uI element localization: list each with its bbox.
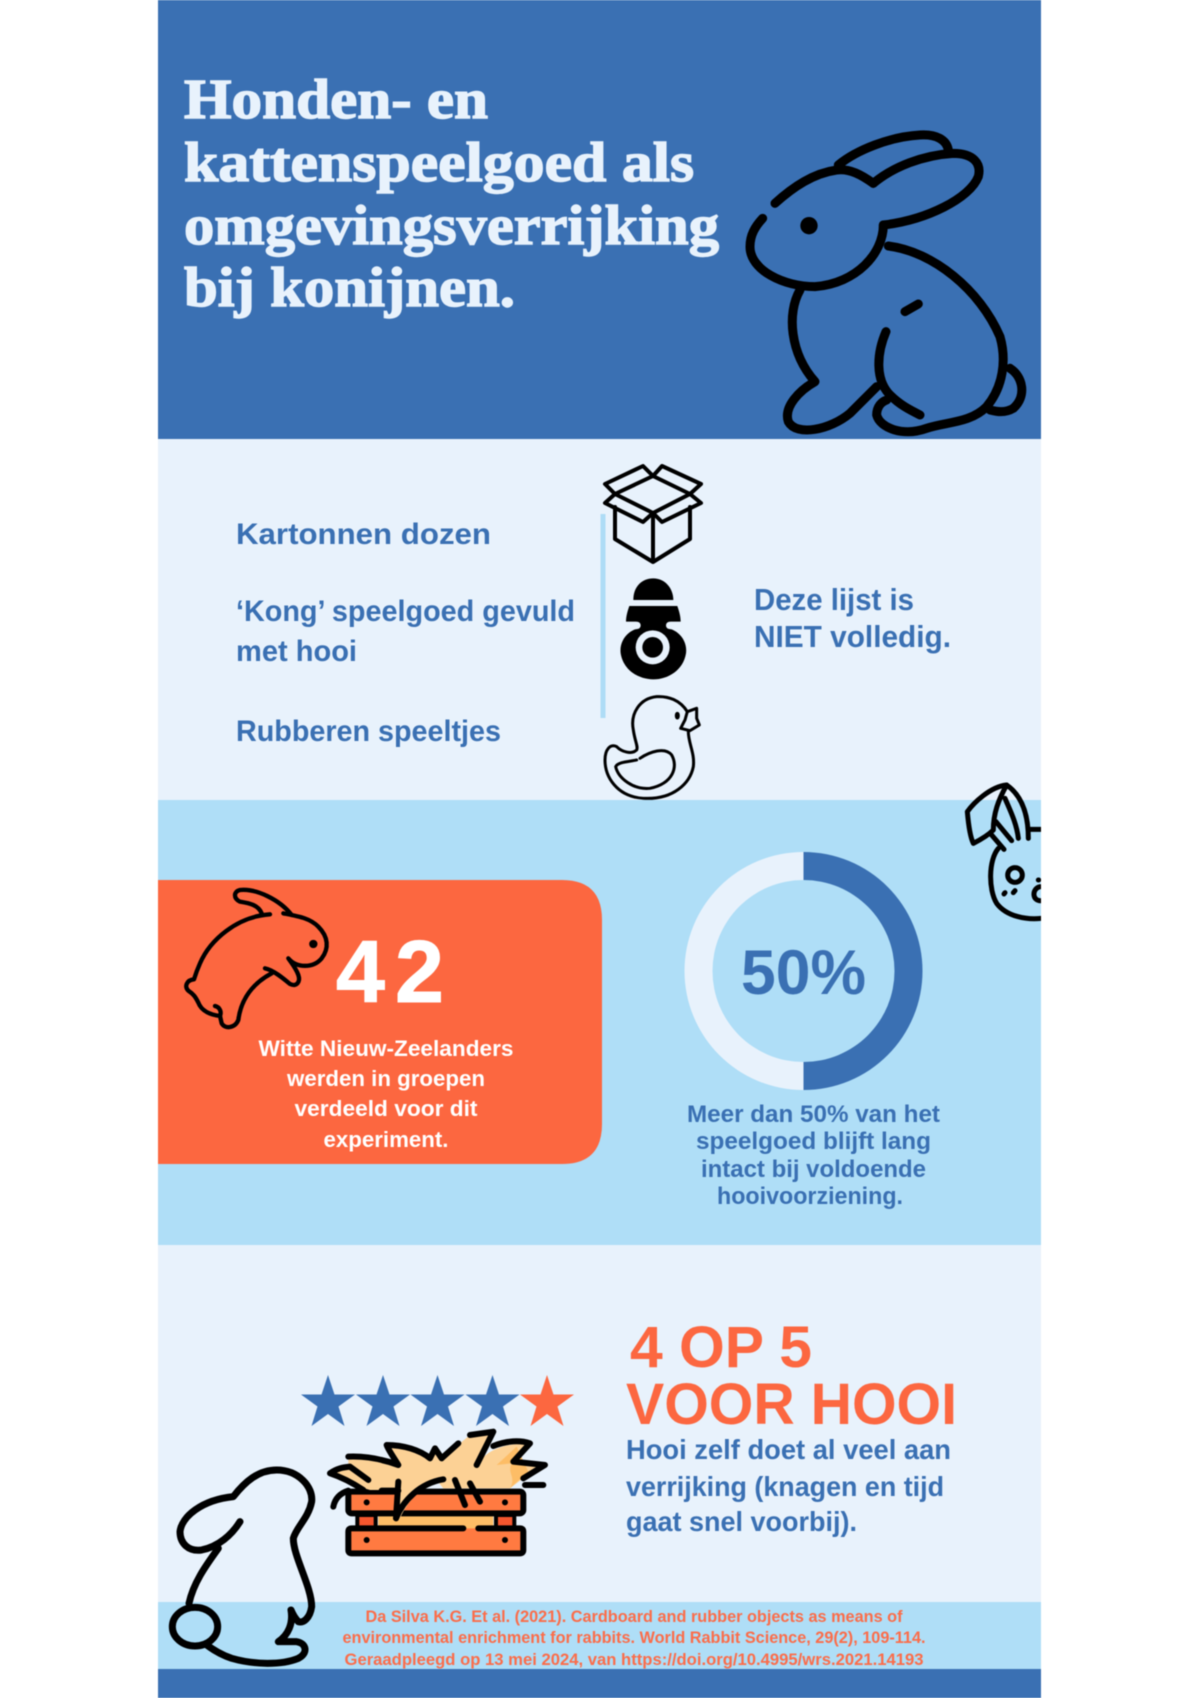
chart: 50% donut (685, 852, 923, 1090)
toy list text: met hooi (236, 635, 357, 668)
card text (258, 1036, 514, 1152)
star rating (301, 1375, 574, 1426)
card text: Witte Nieuw-Zeelanders (258, 1036, 514, 1061)
icon: rubber duck (605, 697, 699, 798)
hay explanation text (626, 1434, 951, 1537)
title: omgevingsverrijking (184, 195, 719, 257)
title: bij konijnen. (184, 257, 515, 319)
heading: 4 op 5 voor hooi: VOOR HOOI (626, 1372, 957, 1437)
card text: verdeeld voor dit (294, 1096, 478, 1121)
donut caption: intact bij voldoende (701, 1156, 926, 1183)
toy list text (236, 518, 575, 748)
icon: Kong toy (620, 578, 686, 679)
chart: 50% donut: 50% (741, 938, 866, 1008)
title (184, 69, 719, 319)
footer bar (158, 1669, 1041, 1698)
icon: rabbit in header (750, 135, 1022, 432)
card: 42 rabbits (158, 880, 602, 1164)
donut caption: speelgoed blijft lang (696, 1128, 931, 1155)
icon: sitting rabbit from behind (172, 1470, 312, 1663)
note: list not complete (754, 582, 951, 654)
card text: werden in groepen (286, 1066, 485, 1091)
icon: jumping rabbit (186, 890, 327, 1027)
hay explanation text: verrijking (knagen en tijd (626, 1471, 944, 1502)
citation: Da Silva K.G. Et al. (2021). Cardboard and rubber objects as means of (366, 1607, 903, 1626)
card text: experiment. (324, 1127, 448, 1152)
heading: 4 op 5 voor hooi (626, 1315, 957, 1437)
donut caption (687, 1101, 940, 1210)
hay explanation text: Hooi zelf doet al veel aan (626, 1434, 951, 1465)
note: list not complete: NIET volledig. (754, 619, 951, 654)
panel: reference band (158, 1602, 1041, 1669)
number 42: 42 (336, 922, 444, 1021)
toy list text: Kartonnen dozen (236, 518, 491, 551)
panel: toy list (158, 439, 1041, 800)
title: Honden- en (184, 69, 488, 131)
toy list text: ‘Kong’ speelgoed gevuld (236, 595, 575, 628)
icon: corner rabbit (964, 782, 1042, 922)
icon: hay crate (330, 1432, 545, 1553)
donut caption: Meer dan 50% van het (687, 1101, 940, 1128)
toy list text: Rubberen speeltjes (236, 715, 501, 748)
note: list not complete: Deze lijst is (754, 582, 914, 617)
icon: cardboard box (605, 466, 701, 562)
hay explanation text: gaat snel voorbij). (626, 1506, 857, 1537)
citation: Geraadpleegd op 13 mei 2024, van https://doi.org/10.4995/wrs.2021.14193 (344, 1650, 924, 1669)
citation (342, 1607, 926, 1669)
panel: header (158, 0, 1041, 439)
panel: hay rating (158, 1245, 1041, 1602)
donut caption: hooivoorziening. (717, 1183, 903, 1210)
heading: 4 op 5 voor hooi: 4 OP 5 (630, 1315, 812, 1380)
panel: statistics (158, 800, 1041, 1245)
title: kattenspeelgoed als (184, 132, 694, 194)
citation: environmental enrichment for rabbits. World Rabbit Science, 29(2), 109-114. (342, 1628, 926, 1647)
